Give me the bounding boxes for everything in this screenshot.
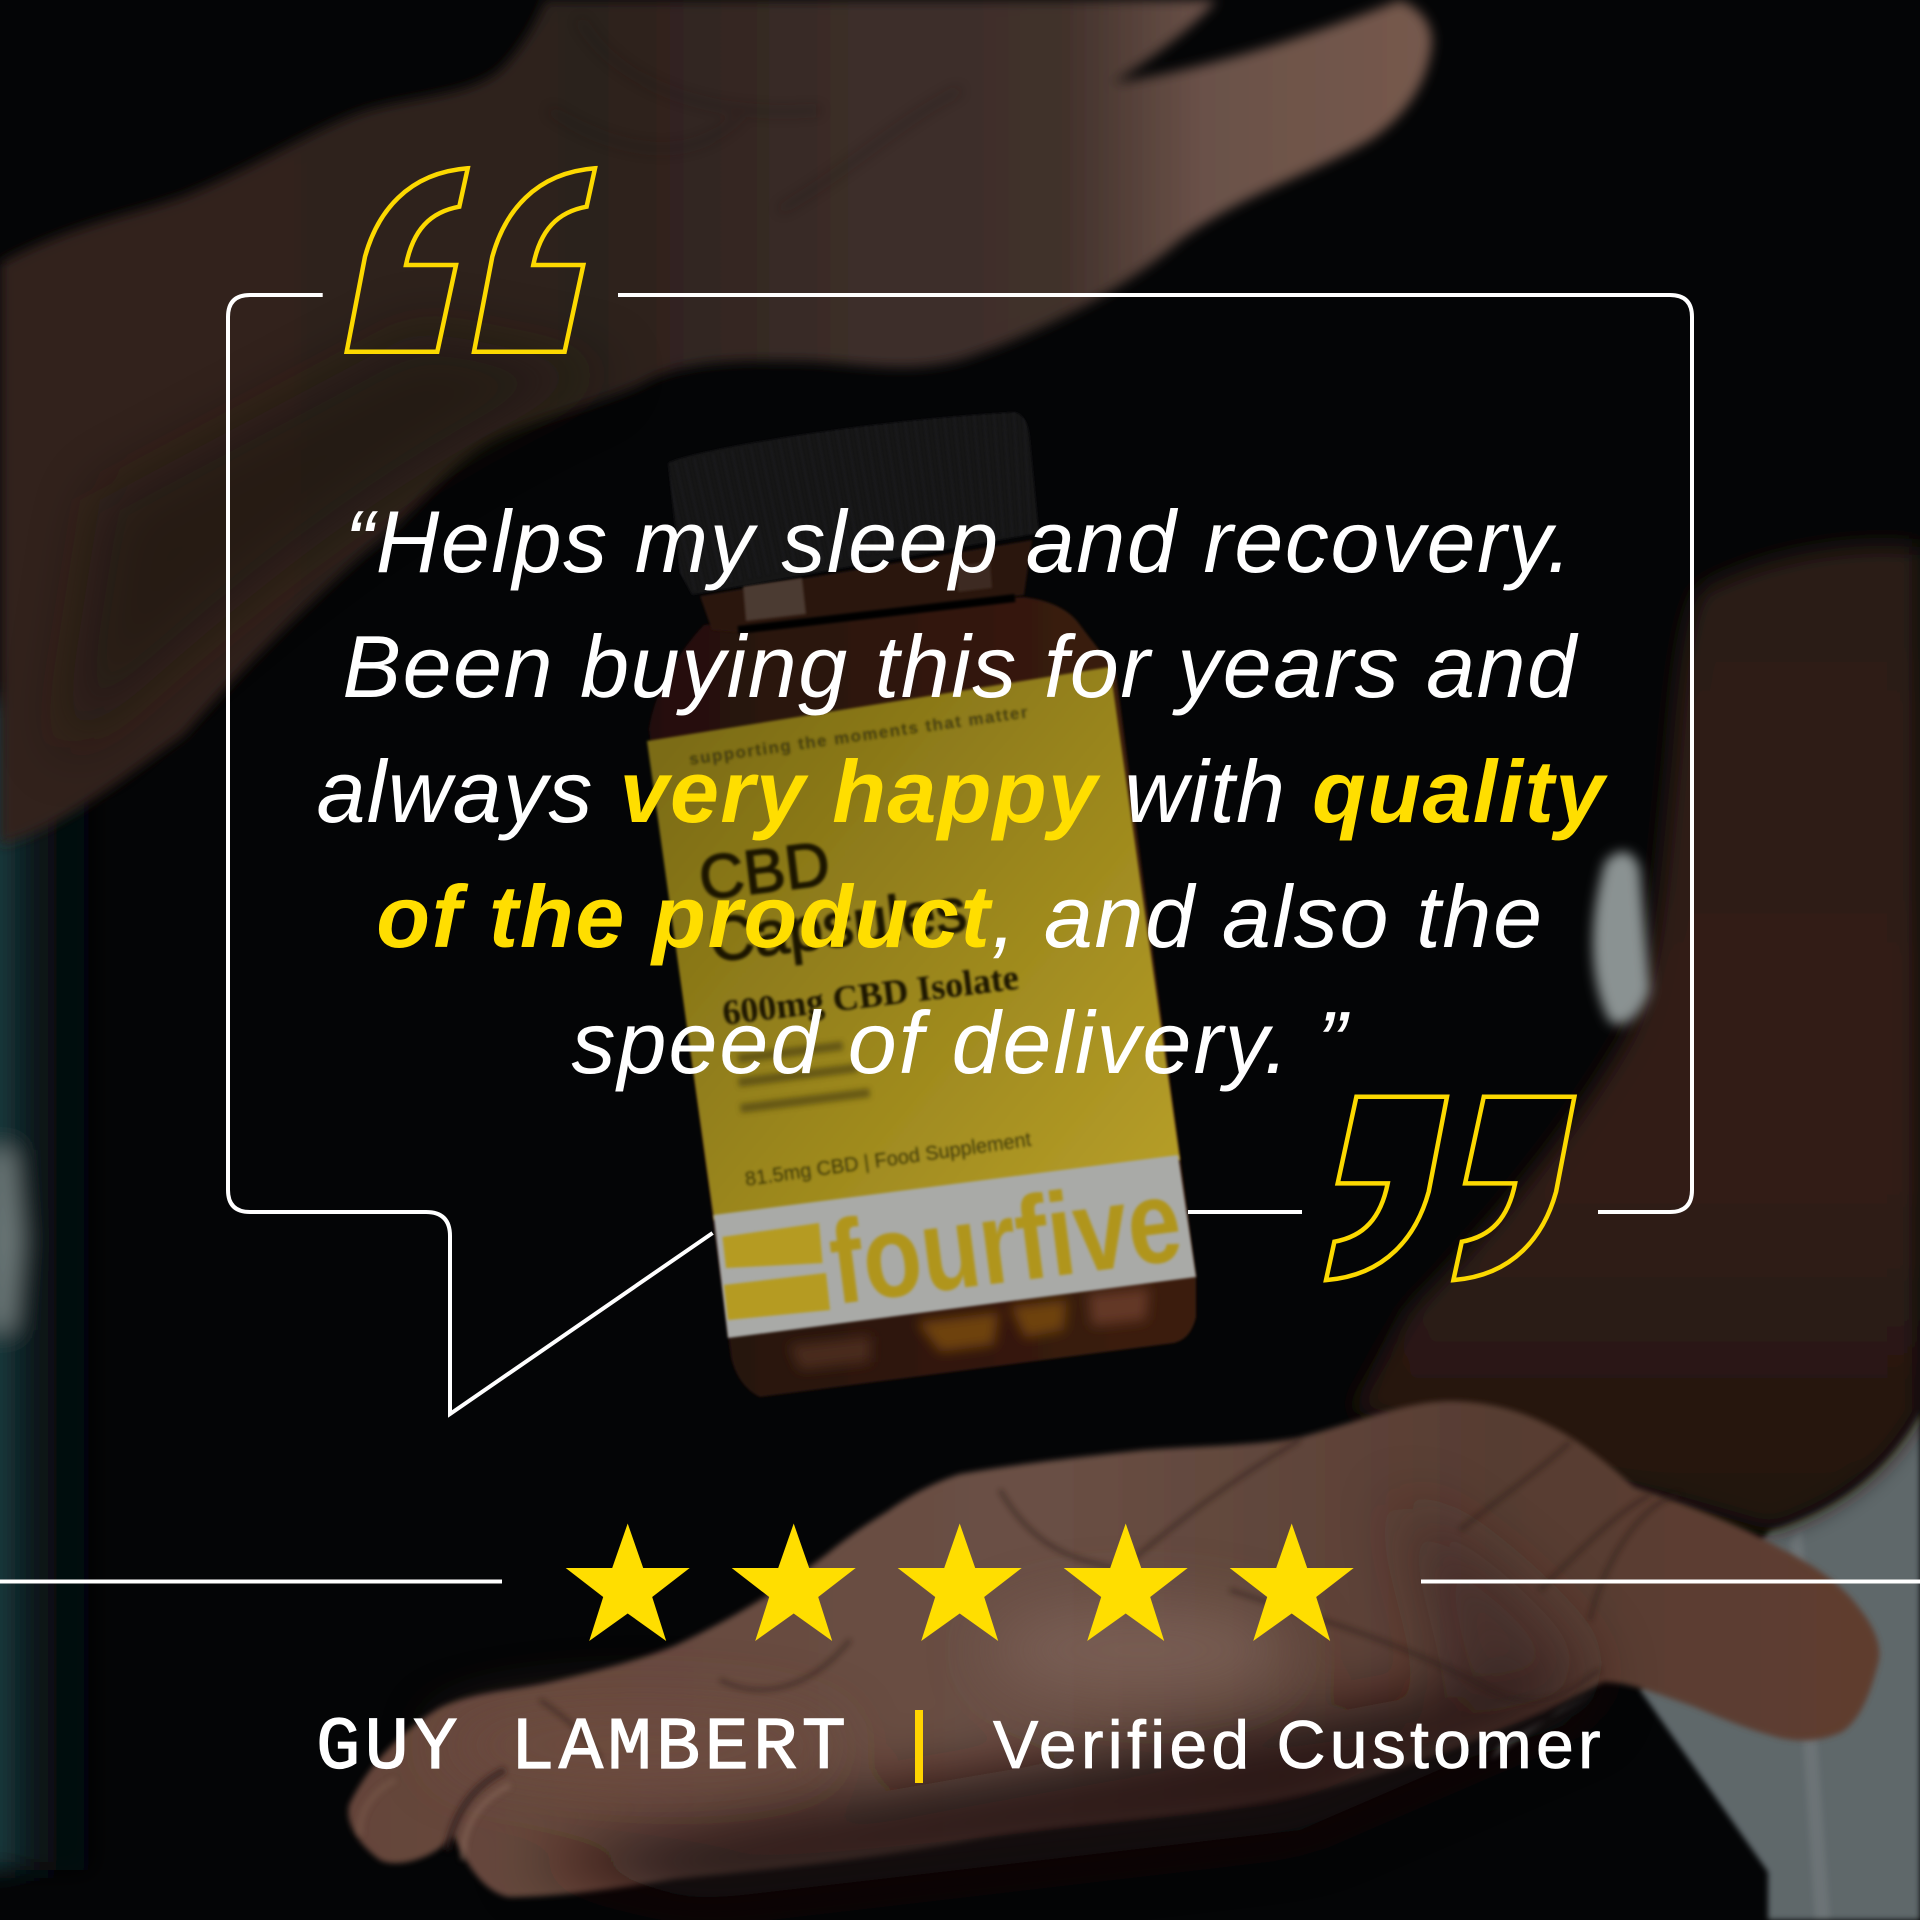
bottle neck: [700, 540, 1032, 632]
label: [647, 667, 1180, 1220]
testimonial quote text: speed of delivery. ”: [572, 993, 1350, 1092]
arm and upper hand: [0, 0, 1432, 845]
teal left edge: [0, 700, 90, 1870]
testimonial quote text: Been buying this for years and: [342, 617, 1579, 716]
creases on upper hand: [550, 20, 960, 210]
testimonial quote text: “Helps my sleep and recovery.: [345, 492, 1573, 591]
brand name: fourfive: [823, 1154, 1188, 1330]
creases on lower hand: [540, 1440, 1680, 1760]
name separator: [915, 1710, 923, 1783]
neck shadow line: [738, 598, 1015, 630]
speech bubble outline: [228, 295, 1692, 1414]
finger separation: [360, 1770, 510, 1860]
testimonial quote text: always very happy with quality: [316, 742, 1608, 841]
label tagline: supporting the moments that matter: [688, 702, 1030, 769]
neck highlight left: [743, 578, 806, 621]
bottle body glass: [649, 597, 1196, 1397]
customer name: GUY LAMBERT: [316, 1707, 850, 1791]
neck highlight right: [957, 562, 992, 592]
bottle cap: [668, 412, 1040, 595]
product bottle: [647, 412, 1196, 1397]
testimonial quote text: of the product, and also the: [376, 867, 1544, 966]
divider with stars: [0, 1524, 1920, 1641]
cuff highlight: [1490, 1690, 1600, 1760]
capsules: [789, 1288, 1149, 1370]
label product name second line: Capsules: [705, 876, 970, 976]
five star rating: [566, 1524, 1354, 1641]
label small lines: [738, 1041, 870, 1113]
lower hand: [348, 1401, 1879, 1897]
opening quotation mark: [347, 168, 595, 352]
label strength: 600mg CBD Isolate: [720, 957, 1021, 1033]
verified label: Verified Customer: [993, 1707, 1605, 1783]
label product name: CBD: [695, 829, 834, 914]
arm shadow: [60, 330, 620, 760]
label footer: 81.5mg CBD | Food Supplement: [744, 1129, 1033, 1191]
lower hand shading: [440, 1500, 1600, 1900]
label white band: [714, 1155, 1196, 1338]
closing quotation mark: [1326, 1097, 1574, 1280]
bright wristband patch: [1593, 852, 1650, 1024]
window light lower right: [1640, 1412, 1920, 1920]
testimonial quote text: [316, 492, 1608, 1092]
brand stripes: [722, 1223, 830, 1320]
forearm right: [1352, 546, 1920, 1530]
cap ribs: [670, 470, 1035, 530]
